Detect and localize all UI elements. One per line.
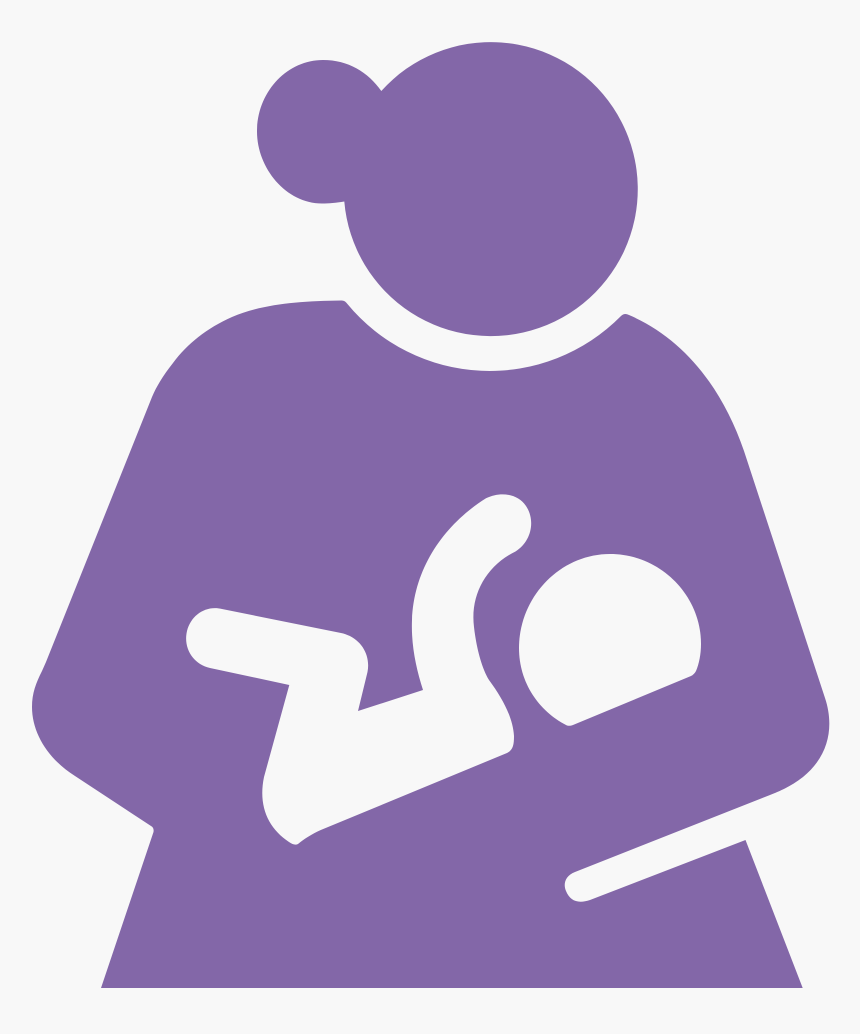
icon: baby body and arm: [186, 494, 531, 845]
icon: mother body: [32, 300, 829, 988]
icon: mother head with hair bun: [257, 42, 638, 336]
icon: baby head: [519, 554, 701, 726]
